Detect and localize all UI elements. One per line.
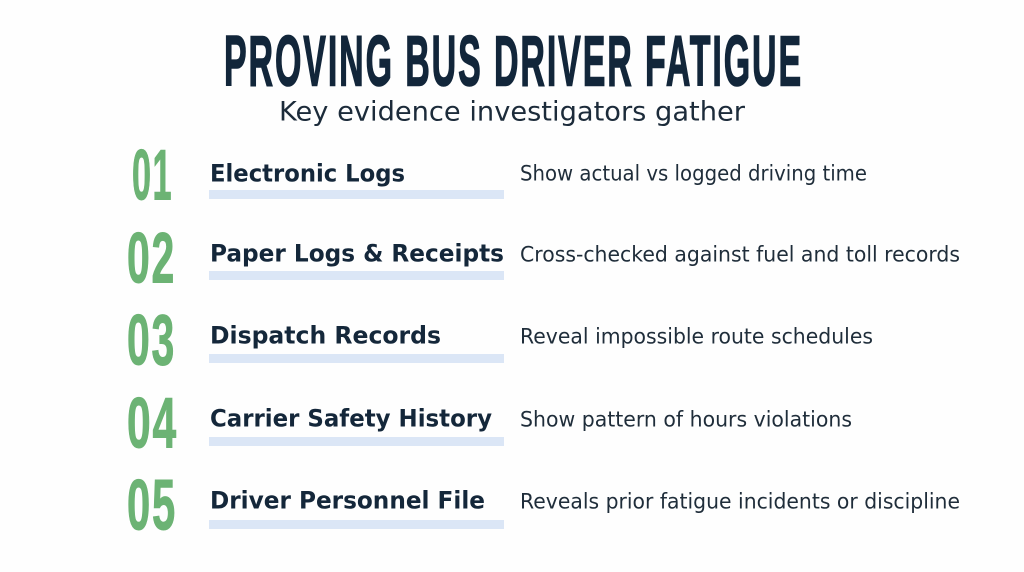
subtitle: Key evidence investigators gather bbox=[279, 96, 746, 128]
row 2: paper logs and receipts bbox=[127, 220, 960, 298]
label: Dispatch Records bbox=[210, 322, 441, 350]
number 02: 02 bbox=[127, 220, 176, 298]
number 05: 05 bbox=[127, 466, 177, 546]
label underline bbox=[209, 437, 504, 446]
row 5: driver personnel file bbox=[127, 466, 960, 546]
label: Paper Logs & Receipts bbox=[210, 240, 504, 268]
number 03: 03 bbox=[127, 302, 176, 380]
number 04: 04 bbox=[127, 384, 178, 464]
description: Reveal impossible route schedules bbox=[520, 324, 873, 350]
description: Cross-checked against fuel and toll records bbox=[520, 242, 960, 268]
row 4: carrier safety history bbox=[127, 384, 852, 464]
label: Carrier Safety History bbox=[210, 404, 492, 432]
row 3: dispatch records bbox=[127, 302, 873, 380]
label underline bbox=[209, 271, 504, 280]
label underline bbox=[209, 190, 504, 199]
description: Reveals prior fatigue incidents or discipline bbox=[520, 490, 960, 514]
description: Show actual vs logged driving time bbox=[520, 162, 867, 186]
label underline bbox=[209, 520, 504, 529]
row 1: electronic logs: 01 bbox=[132, 136, 173, 216]
label: Electronic Logs bbox=[210, 160, 405, 188]
label: Driver Personnel File bbox=[210, 486, 485, 514]
label underline bbox=[209, 354, 504, 363]
description: Show pattern of hours violations bbox=[520, 408, 852, 432]
row 1: electronic logs bbox=[132, 136, 867, 216]
